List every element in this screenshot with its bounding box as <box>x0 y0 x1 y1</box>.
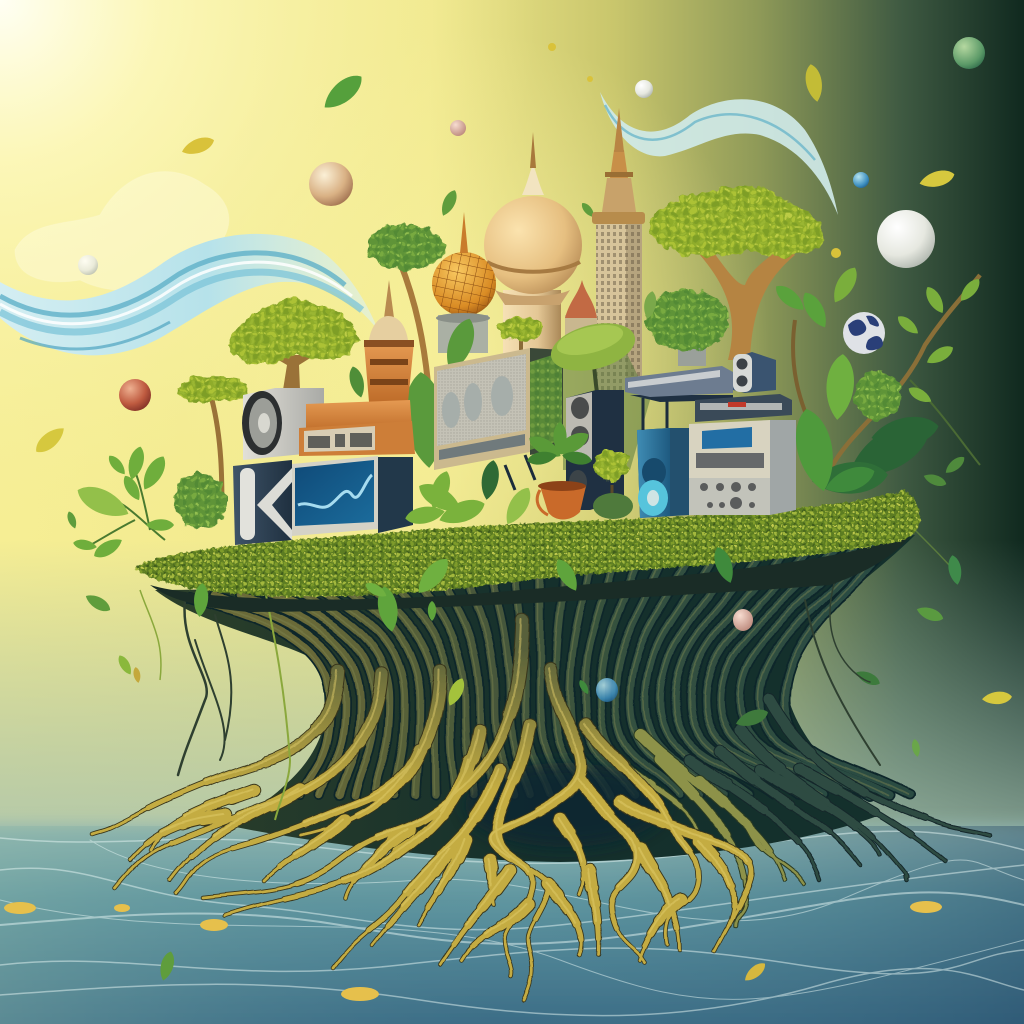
terracotta tower on orange base <box>299 280 415 456</box>
tall central-left tree <box>366 224 444 405</box>
floating spheres <box>78 37 985 411</box>
water ripple lines <box>0 831 1024 1016</box>
K-shaped box <box>233 460 292 545</box>
dark teal roots on right <box>690 700 990 880</box>
big right tree <box>649 186 823 360</box>
slim left tree <box>176 375 249 512</box>
foreground leaf plant <box>404 459 536 530</box>
small yellow-green shrub <box>593 450 633 519</box>
large mesh panel on stand <box>434 348 563 490</box>
floating island moss top <box>135 490 920 612</box>
rounded tree right of tower <box>645 289 729 366</box>
right stereo unit <box>689 420 796 515</box>
leaves overhanging island edge <box>116 544 770 730</box>
golden lit roots <box>90 619 752 1000</box>
stacked receivers <box>695 394 792 422</box>
shadow under centre of roots <box>465 763 665 847</box>
pale mist cloud <box>15 172 229 290</box>
background trees <box>176 186 823 512</box>
pale dome on pillar <box>484 132 582 360</box>
shelf with hi-fi deck <box>625 352 776 430</box>
trunk silhouette <box>155 535 915 862</box>
central strand bundle <box>188 535 910 795</box>
root mass under island <box>90 535 990 1000</box>
right jungle plant with branches <box>771 264 983 586</box>
pot plant leaves <box>526 422 593 467</box>
landmark buildings <box>432 108 645 390</box>
background foliage <box>174 290 658 528</box>
floating golden leaves on water <box>4 901 942 1001</box>
left grey speaker <box>242 388 324 460</box>
patterned globe <box>843 312 885 354</box>
water surface <box>0 826 1024 1024</box>
flowing water ribbon left <box>0 234 378 355</box>
hanging vines <box>140 525 958 820</box>
left umbrella tree <box>228 298 360 390</box>
umbrella plant <box>546 315 640 392</box>
potted plant and foreground plants <box>404 422 633 530</box>
small spheres among roots <box>596 609 753 702</box>
small tree behind speaker <box>499 317 543 350</box>
olive roots centre right <box>600 735 805 925</box>
audio devices and screens <box>233 280 796 545</box>
tall tower <box>592 108 645 390</box>
flowing water ribbon upper right <box>600 92 838 215</box>
blue speaker <box>637 428 689 518</box>
orange glass globe <box>432 212 496 353</box>
left leafy cluster <box>72 445 174 562</box>
terracotta pot <box>537 481 586 520</box>
monitor with waveform <box>292 456 413 536</box>
twin-cone black speaker <box>566 390 624 510</box>
small red dome tower <box>565 280 597 360</box>
